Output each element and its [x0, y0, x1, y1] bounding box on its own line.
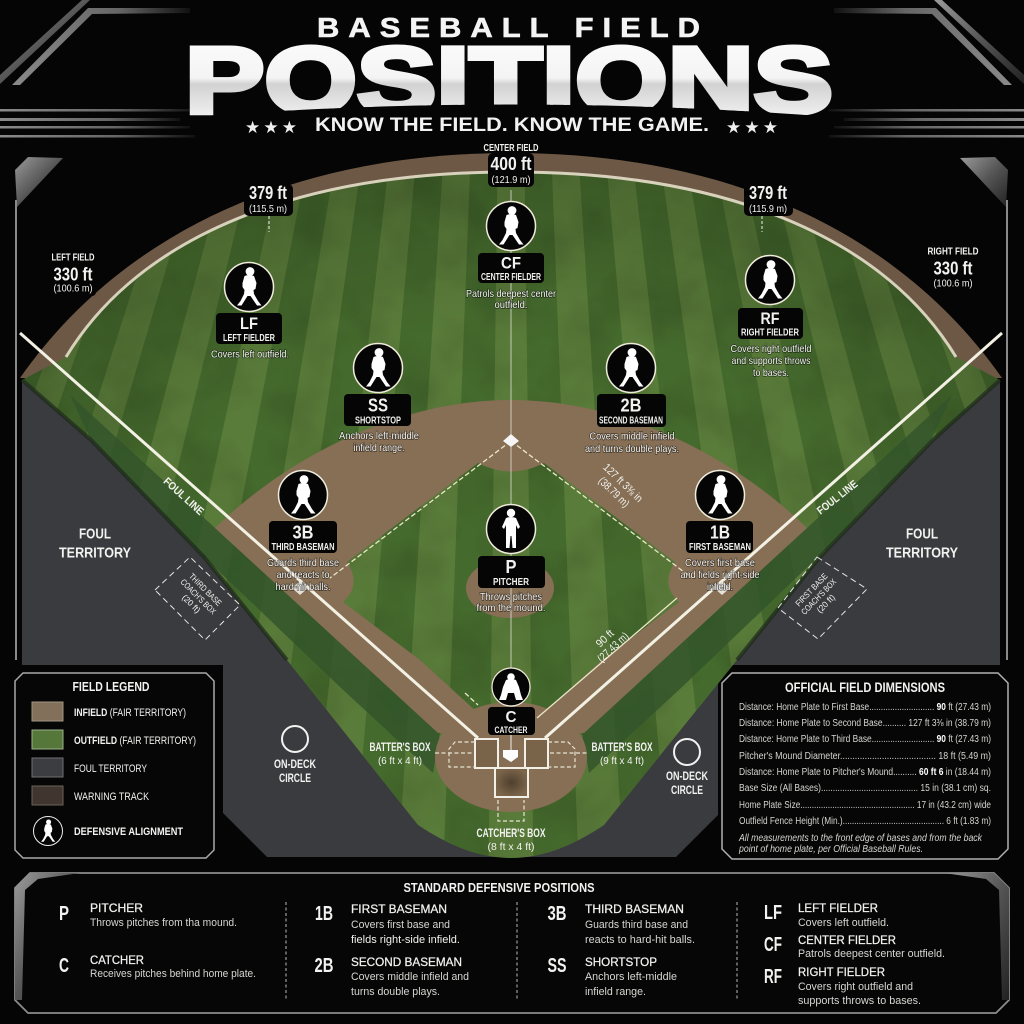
- foul territory label left: [59, 526, 131, 562]
- entry: right fielder: RIGHT FIELDER: [798, 965, 885, 979]
- header corner trim, right: [829, 0, 1024, 138]
- position: shortstop: Anchors left-middle: [339, 430, 419, 442]
- on-deck circle right: CIRCLE: [671, 783, 703, 797]
- bottom panel heading: STANDARD DEFENSIVE POSITIONS: [404, 880, 595, 895]
- entry: catcher: C: [59, 955, 69, 977]
- legend heading: FIELD LEGEND: [72, 680, 150, 694]
- position: second baseman: Covers middle infield: [590, 430, 675, 442]
- third base coach's box: (20 ft): [180, 592, 203, 615]
- warning track: [20, 153, 1002, 378]
- foul territory ground, right: [511, 380, 1000, 857]
- position: first baseman: [680, 470, 760, 593]
- position: first baseman: Covers first base: [685, 557, 755, 569]
- tagline: KNOW THE FIELD. KNOW THE GAME.: [315, 115, 709, 136]
- entry: shortstop: infield range.: [585, 986, 646, 998]
- legend: defensive alignment: [34, 816, 183, 846]
- position: center fielder: Patrols deepest center: [466, 288, 556, 300]
- position: pitcher: [476, 504, 546, 614]
- third base coach's box: THIRD BASE: [187, 571, 224, 608]
- legend: warning track: WARNING TRACK: [74, 791, 150, 803]
- left centre distance: (115.5 m): [249, 203, 287, 215]
- legend: foul territory: FOUL TERRITORY: [74, 763, 148, 775]
- first base coach's box: COACH'S BOX: [799, 576, 838, 617]
- position: right fielder: RF: [760, 309, 780, 328]
- third base coach's box: COACH'S BOX: [179, 577, 218, 617]
- dividers: [286, 902, 737, 1000]
- on-deck circle left: [274, 726, 316, 785]
- right centre distance: 379 ft: [749, 183, 787, 203]
- entry: third baseman: 3B: [548, 903, 566, 925]
- position: right fielder: to bases.: [753, 367, 789, 379]
- on-deck circle left: ON-DECK: [274, 757, 316, 771]
- entry: pitcher: PITCHER: [90, 901, 143, 915]
- panel: field legend: [15, 673, 214, 858]
- position: catcher: CATCHER: [494, 725, 528, 736]
- distance label: first base: (27.43 m): [595, 630, 631, 665]
- home plate dirt circle: [435, 702, 587, 812]
- left field distance: [50, 248, 96, 296]
- title line 1: BASEBALL FIELD: [317, 12, 709, 43]
- entry: right fielder: supports throws to bases.: [798, 995, 921, 1007]
- position: catcher: C: [506, 709, 517, 726]
- center field distance: 400 ft: [490, 154, 532, 174]
- right centre distance: (115.9 m): [749, 203, 787, 215]
- on-deck circle right: [666, 739, 708, 797]
- entry: catcher: [59, 953, 256, 980]
- entry: right fielder: [764, 965, 921, 1007]
- position: shortstop: SS: [368, 396, 388, 416]
- first base coach's box: FIRST BASE: [793, 571, 830, 608]
- dimensions note: point of home plate, per Official Baseball Rules.: [738, 844, 923, 855]
- position: center fielder: outfield.: [494, 299, 528, 311]
- entry: second baseman: 2B: [314, 955, 334, 977]
- panel: official field dimensions: [722, 673, 1008, 859]
- entry: second baseman: turns double plays.: [351, 986, 440, 998]
- left centre distance: [244, 183, 293, 232]
- foul territory label right: [886, 526, 958, 562]
- position: first baseman: 1B: [710, 522, 730, 542]
- left foul line: [20, 333, 478, 738]
- foul territory label left: TERRITORY: [59, 544, 131, 562]
- entry: third baseman: THIRD BASEMAN: [585, 902, 684, 916]
- right field distance: [928, 246, 979, 290]
- entry: center fielder: [764, 933, 945, 960]
- position: first baseman: infield.: [707, 581, 733, 593]
- position: right fielder: RIGHT FIELDER: [741, 328, 800, 338]
- batter's box label left: BATTER'S BOX: [370, 742, 431, 754]
- on-deck circle left: CIRCLE: [279, 771, 311, 785]
- batter's box label left: [370, 742, 431, 767]
- distance label: second base: (38.79 m): [596, 475, 631, 510]
- distance label: first base: [587, 622, 631, 665]
- entry: shortstop: [548, 955, 677, 998]
- entry: catcher: CATCHER: [90, 953, 144, 967]
- position: shortstop: infield range.: [354, 442, 404, 454]
- right field distance: RIGHT FIELD: [928, 246, 979, 258]
- entry: left fielder: LEFT FIELDER: [798, 901, 878, 915]
- entry: first baseman: FIRST BASEMAN: [351, 902, 447, 916]
- position: third baseman: 3B: [292, 522, 314, 542]
- entry: third baseman: [548, 902, 695, 946]
- entry: second baseman: [314, 955, 469, 998]
- legend: warning track: [32, 786, 150, 805]
- batter and catcher boxes: [435, 735, 587, 821]
- entry: right fielder: RF: [764, 966, 782, 988]
- center field distance: (121.9 m): [492, 174, 530, 186]
- position: shortstop: SHORTSTOP: [355, 415, 401, 426]
- position: pitcher: Throws pitches: [480, 591, 542, 603]
- position: shortstop: [339, 344, 419, 454]
- entry: pitcher: Throws pitches from tha mound.: [90, 917, 237, 929]
- third base: [292, 581, 308, 595]
- entry: first baseman: Covers first base and: [351, 919, 450, 931]
- position: left fielder: LEFT FIELDER: [223, 333, 276, 344]
- left centre distance: 379 ft: [249, 183, 287, 203]
- dimensions note: All measurements to the front edge of bases and from the back: [738, 833, 983, 844]
- second base: [503, 434, 519, 447]
- on-deck circle right: ON-DECK: [666, 769, 708, 783]
- corner bevels: [15, 873, 1009, 1000]
- outfield grass: [22, 174, 1000, 858]
- foul territory label right: FOUL: [906, 526, 938, 542]
- position: first baseman: and fields right-side: [680, 569, 760, 581]
- position: second baseman: 2B: [620, 396, 642, 416]
- panel: standard defensive positions: [15, 873, 1009, 1013]
- batter's box label right: (9 ft x 4 ft): [600, 755, 644, 767]
- entry: second baseman: SECOND BASEMAN: [351, 955, 462, 969]
- entry: third baseman: reacts to hard-hit balls.: [585, 934, 695, 946]
- batter's box label right: [592, 742, 653, 767]
- foul line label right: FOUL LINE: [815, 478, 860, 517]
- legend: foul territory: [32, 758, 148, 777]
- right foul line: [545, 333, 1002, 738]
- dimensions rows: [739, 702, 991, 827]
- dimensions note: [738, 833, 983, 855]
- first base: [714, 581, 730, 595]
- entry: shortstop: Anchors left-middle: [585, 971, 677, 983]
- position: left fielder: Covers left outfield.: [211, 348, 289, 360]
- position: third baseman: hard-hit balls.: [276, 581, 330, 593]
- position: pitcher: from the mound.: [476, 602, 546, 614]
- position: center fielder: CENTER FIELDER: [481, 272, 542, 283]
- left field distance: LEFT FIELD: [52, 252, 95, 264]
- position: center fielder: [466, 202, 556, 311]
- first base coach's box: (20 ft): [815, 592, 837, 615]
- position: left fielder: [211, 262, 289, 360]
- legend: infield: INFIELD (FAIR TERRITORY): [74, 707, 186, 719]
- entry: center fielder: CENTER FIELDER: [798, 933, 896, 947]
- entry: first baseman: [315, 902, 460, 946]
- legend: outfield: OUTFIELD (FAIR TERRITORY): [74, 735, 196, 747]
- position: third baseman: and reacts to: [276, 569, 330, 581]
- right field distance: (100.6 m): [934, 278, 972, 290]
- center field distance: [484, 143, 538, 187]
- title block: [185, 12, 833, 138]
- legend: defensive alignment: DEFENSIVE ALIGNMENT: [74, 826, 183, 838]
- entry: pitcher: [59, 901, 237, 929]
- entry: left fielder: Covers left outfield.: [798, 917, 889, 929]
- position: third baseman: [267, 470, 339, 593]
- legend: infield: [32, 702, 186, 721]
- position: third baseman: THIRD BASEMAN: [272, 542, 334, 553]
- distance label: first base: 90 ft: [594, 628, 617, 650]
- dimensions heading: OFFICIAL FIELD DIMENSIONS: [785, 679, 945, 695]
- center line: [510, 190, 512, 750]
- entry: shortstop: SS: [548, 955, 566, 977]
- catcher's box label: [476, 828, 546, 853]
- position: pitcher: PITCHER: [493, 577, 530, 588]
- position: catcher: [488, 668, 535, 736]
- right centre distance: [744, 183, 793, 232]
- position: right fielder: and supports throws: [732, 355, 810, 367]
- entry: right fielder: Covers right outfield and: [798, 981, 913, 993]
- stars right: ★★★: [726, 118, 778, 138]
- position: center fielder: CF: [501, 254, 521, 272]
- infield grass: [343, 463, 679, 709]
- grass edge shadow: [22, 380, 1000, 660]
- third base coach's box: [155, 557, 240, 640]
- entry: catcher: Receives pitches behind home plate.: [90, 968, 256, 980]
- catcher's box label: CATCHER'S BOX: [476, 828, 546, 840]
- distance label: second base: 127 ft 3⅜ in: [600, 462, 645, 505]
- dimensions rows: Distance: Home Plate to Third Base........................... 90 ft (27.43 m): [739, 734, 991, 745]
- stars left: ★★★: [245, 118, 297, 138]
- field panel frame: [15, 157, 1008, 660]
- outfield fence line: [66, 172, 956, 357]
- entry: first baseman: fields right-side infield.: [351, 934, 460, 946]
- title line 2: POSITIONS: [185, 28, 833, 132]
- entry: second baseman: Covers middle infield and: [351, 971, 469, 983]
- dimensions rows: Pitcher's Mound Diameter....................................... 18 ft (5.49 m): [739, 751, 991, 762]
- entry: first baseman: 1B: [315, 903, 333, 925]
- entry: left fielder: LF: [764, 902, 782, 924]
- entry: center fielder: Patrols deepest center outfield.: [798, 948, 945, 960]
- position: second baseman: and turns double plays.: [585, 443, 679, 455]
- legend: outfield: [32, 730, 196, 749]
- dimensions rows: Distance: Home Plate to Pitcher's Mound.......... 60 ft 6 in (18.44 m): [739, 767, 991, 778]
- position: first baseman: FIRST BASEMAN: [689, 542, 751, 553]
- batter's box label left: (6 ft x 4 ft): [378, 755, 422, 767]
- left field distance: (100.6 m): [54, 282, 92, 294]
- pitcher's mound: [466, 558, 554, 618]
- position: third baseman: Guards third base: [267, 557, 339, 569]
- position: second baseman: [585, 344, 679, 455]
- dimensions rows: Distance: Home Plate to First Base............................ 90 ft (27.43 m): [739, 702, 991, 713]
- catcher's box label: (8 ft x 4 ft): [488, 841, 534, 853]
- position: right fielder: [730, 256, 812, 379]
- batter's box label right: BATTER'S BOX: [592, 742, 653, 754]
- left field distance: 330 ft: [54, 264, 92, 284]
- entry: center fielder: CF: [764, 934, 782, 956]
- entry: pitcher: P: [59, 903, 69, 925]
- header corner trim, left: [0, 0, 195, 138]
- right field distance: 330 ft: [934, 258, 972, 278]
- position: second baseman: SECOND BASEMAN: [599, 416, 663, 426]
- position: pitcher: P: [506, 557, 516, 577]
- position: right fielder: Covers right outfield: [730, 343, 812, 355]
- foul territory label left: FOUL: [79, 526, 111, 542]
- entry: left fielder: [764, 901, 889, 929]
- foul territory ground, left: [22, 380, 511, 857]
- entry: shortstop: SHORTSTOP: [585, 955, 657, 969]
- center field distance: CENTER FIELD: [484, 143, 538, 154]
- first base coach's box: [778, 557, 867, 639]
- infield dirt: [215, 400, 807, 733]
- foul territory label right: TERRITORY: [886, 544, 958, 562]
- entry: third baseman: Guards third base and: [585, 919, 688, 931]
- position: left fielder: LF: [240, 314, 258, 333]
- base paths: [330, 441, 692, 718]
- foul line label left: FOUL LINE: [161, 476, 206, 518]
